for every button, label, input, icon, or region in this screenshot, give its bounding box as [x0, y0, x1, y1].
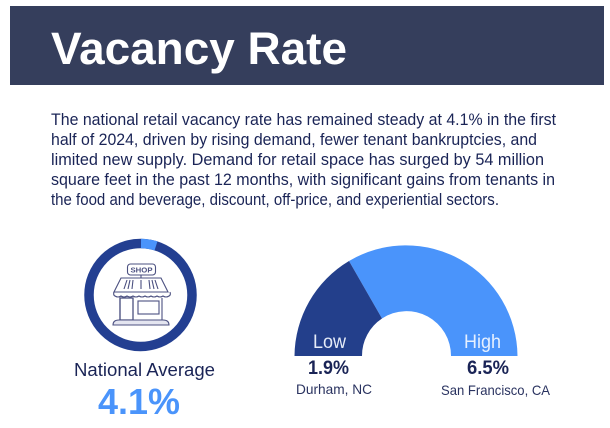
gauge label: high: High	[464, 332, 501, 353]
icon: shop	[113, 264, 170, 325]
intro paragraph: half of 2024, driven by rising demand, fewer tenant bankruptcies, and	[51, 131, 537, 149]
title: Vacancy Rate	[51, 23, 347, 74]
intro paragraph: the food and beverage, discount, off-price, and experiential sectors.	[51, 191, 499, 209]
low location: Durham, NC	[296, 381, 372, 397]
panel: low and high gauge	[294, 245, 551, 398]
low value: 1.9%	[308, 358, 349, 379]
icon label: shop: SHOP	[130, 268, 153, 274]
value: national average: 4.1%	[98, 381, 180, 422]
gauge: high segment	[349, 245, 518, 356]
gauge label: low: Low	[313, 332, 346, 353]
intro paragraph: The national retail vacancy rate has remained steady at 4.1% in the first	[51, 111, 556, 129]
intro paragraph	[51, 111, 556, 209]
header banner	[10, 6, 604, 85]
donut ring	[89, 244, 192, 346]
intro paragraph: limited new supply. Demand for retail space has surged by 54 million	[51, 151, 544, 169]
label: national average: National Average	[74, 360, 215, 380]
high location: San Francisco, CA	[441, 382, 551, 398]
panel: national average	[74, 244, 215, 422]
gauge: low segment	[294, 261, 382, 356]
high value: 6.5%	[467, 358, 509, 379]
intro paragraph: square feet in the past 12 months, with significant gains from tenants in	[51, 171, 555, 189]
